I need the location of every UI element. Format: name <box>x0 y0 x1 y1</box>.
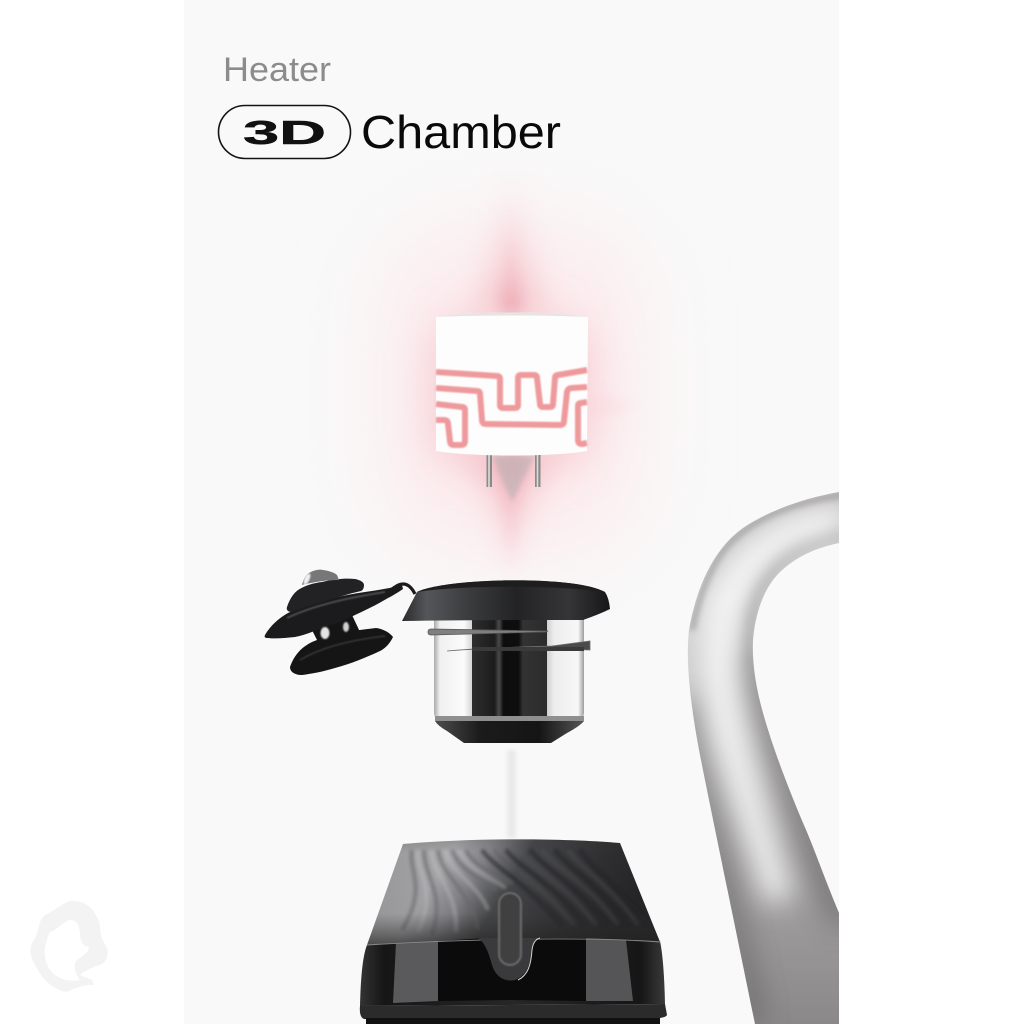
glossy black band <box>360 940 665 1006</box>
grey shadow between pins <box>492 456 535 502</box>
cylinder top rim <box>436 312 588 317</box>
badge: 3D pill <box>218 106 350 158</box>
handle shading <box>687 495 845 1024</box>
badge: 3D pill: 3D <box>243 114 326 151</box>
textured cone <box>367 839 660 945</box>
bottom collar <box>435 716 584 721</box>
silicone mouthpiece cap <box>265 570 415 675</box>
upper disc sheen <box>287 592 385 618</box>
vaporizer base <box>360 839 667 1024</box>
lower disc sheen <box>300 636 385 660</box>
heating chamber cup <box>402 580 610 743</box>
ring shadow <box>472 647 584 651</box>
steam line under chamber <box>507 750 516 838</box>
knob dome <box>302 570 339 585</box>
band gloss rim <box>367 939 660 945</box>
metal pins <box>486 454 540 487</box>
neck <box>312 615 360 650</box>
knob <box>287 579 364 612</box>
lower retaining ring <box>447 641 590 651</box>
upper retaining ring <box>428 629 548 635</box>
upper disc <box>265 585 403 638</box>
band reflection left <box>393 941 438 1003</box>
heating trace pattern <box>436 370 587 445</box>
heading: Heater: Heater <box>223 51 331 89</box>
heater ceramic cylinder <box>436 312 588 502</box>
knob glint <box>302 573 312 585</box>
handle tube <box>688 492 839 1024</box>
cap upper face <box>417 580 605 592</box>
watermark smoke logo <box>31 901 108 992</box>
tether strap <box>385 584 415 594</box>
notch around button <box>478 938 540 980</box>
cylinder body <box>436 312 588 456</box>
lower disc <box>290 628 393 675</box>
band black panel right <box>512 938 586 1001</box>
lower ring <box>360 1004 667 1019</box>
stem glints <box>320 627 330 639</box>
heading: Chamber: Chamber <box>361 106 561 158</box>
gooseneck handle <box>687 492 845 1024</box>
notch edge highlight <box>518 938 540 980</box>
bottom body <box>366 1018 660 1024</box>
red heat glow <box>386 199 640 574</box>
glass body <box>434 618 584 718</box>
page panel background <box>184 0 839 1024</box>
wave ribs <box>402 850 648 935</box>
button pill <box>499 893 521 965</box>
band black panel left <box>438 938 512 1001</box>
band reflection right <box>585 938 633 1001</box>
cone shading <box>367 839 660 945</box>
black core <box>472 620 547 716</box>
cap side <box>402 580 610 621</box>
bottom taper <box>435 721 584 743</box>
